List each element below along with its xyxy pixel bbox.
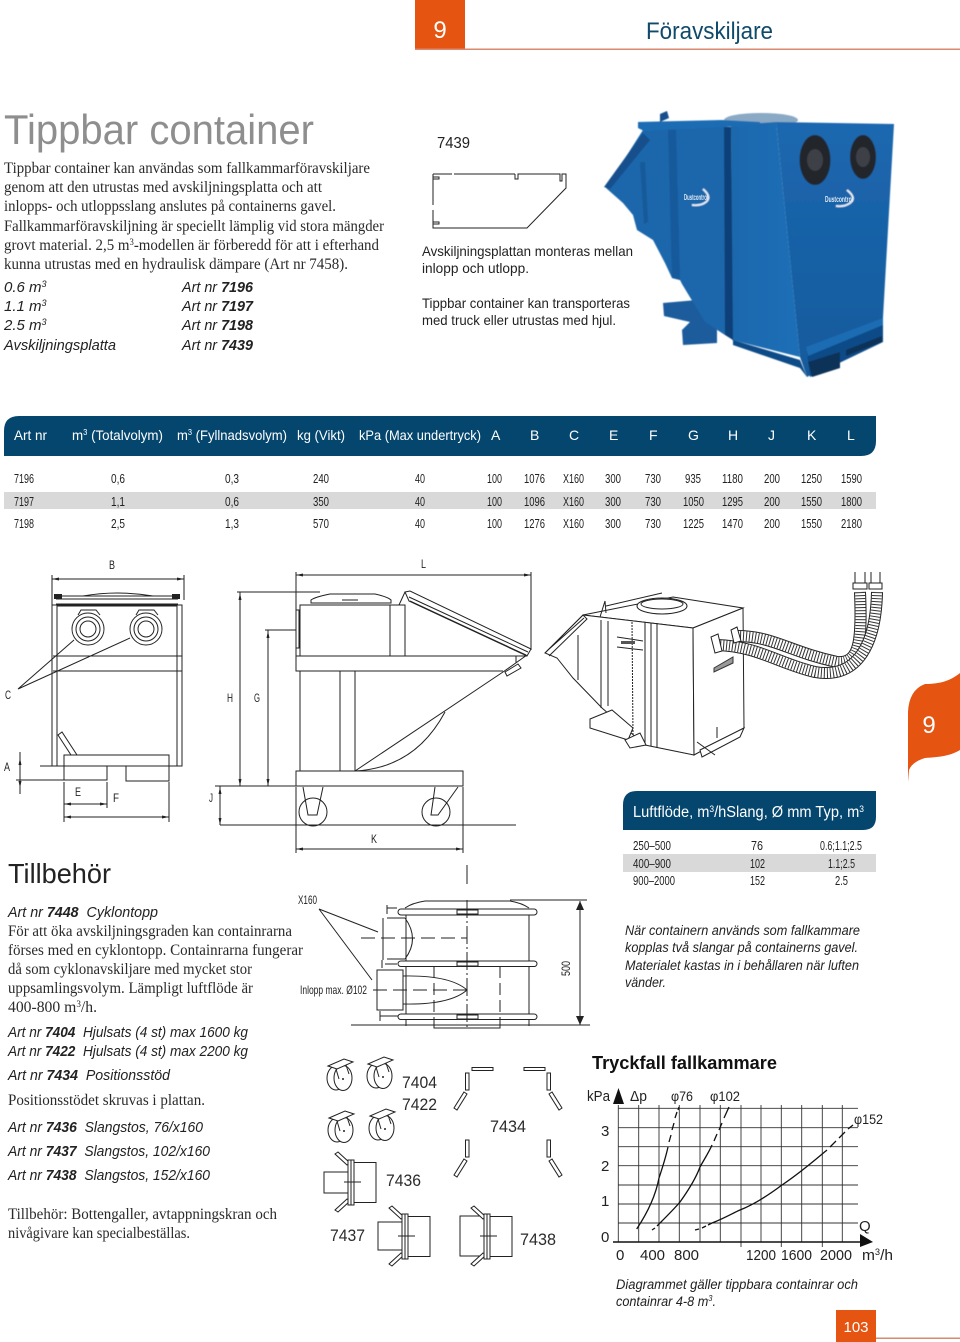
dimension markers H, G, J: [209, 592, 320, 825]
accessories text: Art nr 7438 Slangstos, 152/x160: [7, 1167, 211, 1184]
row 7198: 2180: [841, 516, 862, 531]
accessories text: Tillbehör: Bottengaller, avtappningskran och: [8, 1206, 277, 1223]
chart labels: 1: [601, 1193, 609, 1210]
article number list: Avskiljningsplatta: [3, 337, 116, 354]
photo: blue container: Dustcontrol: [684, 193, 708, 202]
airflow rows: 400–900: [633, 856, 671, 871]
row 7197: 300: [605, 494, 621, 509]
airflow rows: 900–2000: [633, 873, 675, 888]
chart labels: [587, 1088, 893, 1264]
chart title: Tryckfall fallkammare: [592, 1053, 777, 1073]
table header bar: (Totalvolym): [87, 427, 163, 443]
article number list: 0.6 m: [4, 279, 42, 296]
chapter side tab: [908, 673, 960, 782]
chart labels: 0: [616, 1247, 624, 1264]
adapter 7437 number: 7437: [330, 1226, 365, 1245]
cyclone top drawing: [298, 865, 590, 1030]
intro paragraph: grovt material. 2,5 m: [4, 237, 134, 254]
row 7197: 1,1: [111, 494, 125, 509]
page number: [836, 1310, 960, 1342]
row 7197: 200: [764, 494, 780, 509]
row 7197: 1050: [683, 494, 704, 509]
row 7196: 100: [487, 471, 502, 486]
dimension markers H, G, J: J: [209, 791, 213, 805]
airflow rows: 2.5: [835, 873, 848, 888]
chart grid: [618, 1105, 858, 1247]
airflow table header: Luftflöde, m: [633, 804, 714, 821]
accessories text: 400-800 m: [8, 999, 76, 1016]
chart labels: /h: [880, 1247, 893, 1264]
table header bar: kPa (Max undertryck): [359, 427, 481, 443]
cyclone top drawing: 500: [559, 961, 573, 976]
table header bar: [4, 416, 876, 456]
row 7196: [14, 471, 862, 486]
intro paragraph: -modellen är förberedd för att i efterhand: [134, 237, 379, 254]
article number list: 2.5 m: [4, 317, 42, 334]
accessories: hose adapter 7438: [460, 1206, 512, 1266]
curve d102: [652, 1107, 729, 1230]
accessories text: Art nr 7437 Slangstos, 102/x160: [7, 1143, 211, 1160]
airflow rows: 102: [750, 856, 765, 871]
accessories text: Art nr 7422 Hjulsats (4 st) max 2200 kg: [7, 1043, 249, 1060]
row 7198: 2,5: [111, 516, 125, 531]
chart labels: 800: [674, 1247, 699, 1264]
section title: Föravskiljare: [646, 18, 773, 45]
table header bar: m: [72, 427, 84, 443]
table header bar: B: [530, 427, 539, 443]
row 7196: 240: [313, 471, 329, 486]
chart labels: φ102: [710, 1088, 740, 1104]
airflow rows: 0.6;1.1;2.5: [820, 838, 862, 853]
chart labels: 3: [601, 1123, 609, 1140]
row 7198: 200: [764, 516, 780, 531]
intro paragraph: Fallkammarföravskiljning är speciellt lämplig vid stora mängder: [4, 218, 385, 235]
curve d76: [637, 1107, 679, 1229]
adapter 7438 number: 7438: [520, 1230, 556, 1249]
article number list: Art nr 7439: [181, 337, 254, 354]
caster article numbers: 7404: [402, 1073, 437, 1092]
airflow table header: [623, 791, 876, 830]
airflow rows: 152: [750, 873, 765, 888]
row 7198: 1276: [524, 516, 545, 531]
table header bar: K: [807, 427, 817, 443]
separator plate label: 7439: [437, 135, 470, 152]
row 7196: 935: [685, 471, 701, 486]
chart labels: kPa: [587, 1088, 611, 1105]
row 7197: 40: [415, 494, 425, 509]
row 7198: 1225: [683, 516, 704, 531]
hose usage note: kopplas två slangar på containerns gavel.: [625, 940, 858, 955]
row 7197: 1800: [841, 494, 862, 509]
accessories text: Art nr 7434 Positionsstöd: [7, 1067, 171, 1084]
front view technical drawing: F: [113, 791, 119, 805]
article number list: 3: [42, 279, 47, 289]
side view technical drawing: K: [371, 832, 377, 846]
accessories text: [7, 904, 304, 1242]
plate and transport notes: inlopp och utlopp.: [422, 260, 529, 276]
side view technical drawing: [220, 557, 531, 853]
plate and transport notes: Avskiljningsplattan monteras mellan: [422, 243, 633, 259]
table header bar: Art nr: [14, 427, 47, 443]
row 7197: 100: [487, 494, 502, 509]
row 7198: 40: [415, 516, 425, 531]
row 7196: 1590: [841, 471, 862, 486]
chart labels: 2: [601, 1158, 609, 1175]
table header bar: L: [847, 427, 855, 443]
row 7197: X160: [563, 494, 584, 509]
row 7197: 1295: [722, 494, 743, 509]
front view technical drawing: C: [5, 688, 11, 702]
chart axes: [613, 1088, 873, 1247]
table header bar: m: [177, 427, 189, 443]
table header bar: G: [688, 427, 699, 443]
table header bar: C: [569, 427, 579, 443]
chart labels: 3: [875, 1247, 880, 1257]
chart footnote: [616, 1277, 858, 1309]
row 7197: 7197: [14, 494, 34, 509]
chart labels: 1600: [781, 1247, 812, 1264]
chapter number tab: 9: [433, 17, 447, 44]
airflow rows: 250–500: [633, 838, 671, 853]
adapter 7436 number: 7436: [386, 1171, 421, 1190]
row 7196: 200: [764, 471, 780, 486]
hose front: [717, 592, 877, 673]
accessories text: Art nr 7436 Slangstos, 76/x160: [7, 1119, 204, 1136]
table header bar: 3: [188, 428, 193, 437]
header rule: [415, 48, 960, 50]
row 7196: 1250: [801, 471, 822, 486]
table header bar: F: [649, 427, 658, 443]
chart labels: φ152: [854, 1111, 883, 1127]
chart footnote: Diagrammet gäller tippbara containrar och: [616, 1277, 858, 1292]
table header bar: A: [491, 427, 501, 443]
plate and transport notes: [422, 243, 633, 328]
airflow rows: [623, 838, 876, 888]
row 7196: 730: [645, 471, 661, 486]
accessories: hose adapter 7436: [324, 1152, 376, 1212]
row 7198: 1550: [801, 516, 822, 531]
airflow table header: /hSlang, Ø mm Typ, m: [714, 804, 859, 821]
table header bar: 3: [83, 428, 88, 437]
row 7196: 0,6: [111, 471, 125, 486]
article number list: [3, 279, 254, 354]
chart labels: 2000: [820, 1247, 852, 1264]
row 7196: 1076: [524, 471, 545, 486]
table header bar: H: [728, 427, 738, 443]
row 7196: 40: [415, 471, 425, 486]
row 7196: X160: [563, 471, 584, 486]
airflow rows: 1.1;2.5: [828, 856, 855, 871]
pressure drop chart: [587, 1053, 893, 1264]
page number: 103: [843, 1319, 869, 1336]
hose usage note: [625, 923, 860, 990]
table header bar: kg (Vikt): [297, 427, 345, 443]
chart footnote: 3: [708, 1294, 713, 1303]
cyclone top drawing: X160: [298, 893, 317, 907]
row 7197: 1096: [524, 494, 545, 509]
row 7196: 0,3: [225, 471, 239, 486]
chart labels: 400: [640, 1247, 665, 1264]
accessories text: uppsamlingsvolym. Lämpligt luftflöde är: [8, 980, 254, 997]
accessories text: nivågivare kan specialbeställas.: [8, 1225, 190, 1242]
photo: blue container: Dustcontrol: [825, 195, 853, 204]
row 7198: 7198: [14, 516, 34, 531]
hose back: [737, 592, 861, 662]
side view technical drawing: L: [421, 557, 426, 571]
support article number: 7434: [490, 1117, 526, 1136]
accessories: position supports: [454, 1068, 562, 1177]
chapter number tab: [415, 0, 465, 49]
row 7198: 570: [313, 516, 329, 531]
accessories text: Positionsstödet skruvas i plattan.: [8, 1092, 205, 1109]
row 7198: 100: [487, 516, 502, 531]
hose usage note: När containern används som fallkammare: [625, 923, 860, 938]
accessories: caster wheels: [327, 1057, 395, 1142]
front view technical drawing: E: [75, 785, 81, 799]
separator plate drawing: [433, 174, 566, 228]
article number list: 3: [42, 317, 47, 327]
article number list: Art nr 7198: [181, 317, 254, 334]
airflow rows: 76: [751, 838, 763, 853]
table header bar: E: [609, 427, 618, 443]
accessories text: Art nr 7404 Hjulsats (4 st) max 1600 kg: [7, 1024, 249, 1041]
accessories text: då som cyklonavskiljare med mycket stor: [8, 961, 253, 978]
row 7198: 300: [605, 516, 621, 531]
chapter side tab: 9: [922, 712, 936, 739]
row 7197: 350: [313, 494, 329, 509]
row 7196: 300: [605, 471, 621, 486]
chart labels: 0: [601, 1229, 609, 1246]
row 7198: 1,3: [225, 516, 239, 531]
main heading: Tippbar container: [4, 106, 314, 153]
photo: blue container: [604, 111, 894, 377]
intro paragraph: kunna utrustas med en hydraulisk dämpare (Art nr 7458).: [4, 256, 348, 273]
row 7197: [4, 492, 876, 509]
chart labels: Q: [859, 1218, 871, 1235]
plate and transport notes: Tippbar container kan transporteras: [422, 295, 630, 311]
intro paragraph: [4, 160, 385, 273]
accessories: hose adapter 7437: [378, 1206, 430, 1266]
dimension markers H, G, J: H: [227, 691, 233, 705]
table header bar: J: [768, 427, 775, 443]
airflow table header: 3: [709, 804, 714, 814]
chart footnote: containrar 4-8 m: [616, 1294, 714, 1309]
caster article numbers: [402, 1073, 437, 1114]
article number list: Art nr 7197: [181, 298, 254, 315]
row 7197: 1550: [801, 494, 822, 509]
accessories text: /h.: [81, 999, 97, 1016]
row 7196: 1180: [722, 471, 743, 486]
front view technical drawing: [4, 558, 184, 822]
row 7198: 1470: [722, 516, 743, 531]
chart labels: m: [862, 1247, 874, 1264]
airflow table header: 3: [859, 804, 864, 814]
specification table: [4, 416, 876, 531]
isometric drawing with hoses: [545, 572, 882, 757]
accessories text: 3: [76, 999, 81, 1009]
hose usage note: Materialet kastas in i behållaren när luften: [625, 958, 859, 973]
front view technical drawing: A: [4, 760, 10, 774]
article number list: 3: [42, 298, 47, 308]
accessories text: För att öka avskiljningsgraden kan containrarna: [8, 923, 292, 940]
row 7198: X160: [563, 516, 584, 531]
article number list: Art nr 7196: [181, 279, 254, 296]
accessories text: Art nr 7448 Cyklontopp: [7, 904, 158, 921]
plate and transport notes: med truck eller utrustas med hjul.: [422, 312, 616, 328]
table header bar: (Fyllnadsvolym): [192, 427, 287, 443]
intro paragraph: genom att den utrustas med avskiljningsplatta och att: [4, 179, 323, 196]
accessories text: förses med en cyklontopp. Containrarna fungerar: [8, 942, 304, 959]
row 7196: 7196: [14, 471, 34, 486]
chart footnote: .: [712, 1294, 716, 1309]
front view technical drawing: B: [109, 558, 115, 572]
hose usage note: vänder.: [625, 975, 666, 990]
intro paragraph: 3: [130, 237, 134, 247]
intro paragraph: inlopps- och utloppsslang anslutes på containerns gavel.: [4, 198, 336, 215]
dimension markers H, G, J: G: [254, 691, 260, 705]
article number list: 1.1 m: [4, 298, 42, 315]
row 7198: 730: [645, 516, 661, 531]
airflow table: [623, 791, 876, 888]
row 7197: 730: [645, 494, 661, 509]
cyclone top drawing: Inlopp max. Ø102: [300, 983, 367, 997]
row 7197: 0,6: [225, 494, 239, 509]
caster article numbers: 7422: [402, 1095, 437, 1114]
row 7198: [14, 516, 862, 531]
curve d152: [695, 1125, 853, 1230]
chart labels: 1200: [746, 1247, 776, 1264]
chart labels: Δp: [630, 1088, 647, 1105]
intro paragraph: Tippbar container kan användas som fallkammarföravskiljare: [4, 160, 370, 177]
chart labels: φ76: [671, 1088, 693, 1104]
accessories heading: Tillbehör: [8, 858, 111, 889]
